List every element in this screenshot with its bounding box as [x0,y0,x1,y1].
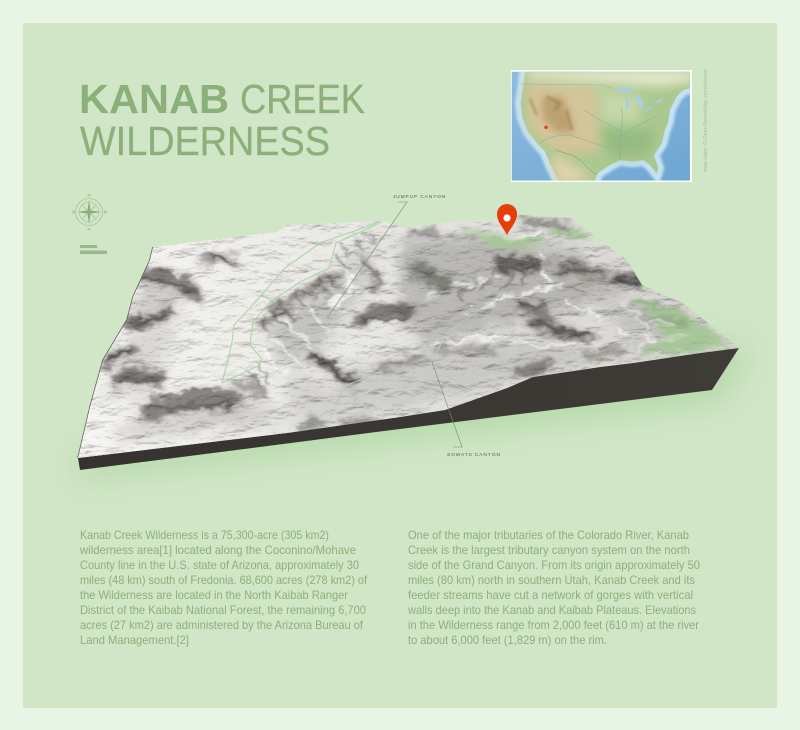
Great Lakes [615,88,663,112]
terrain surface [78,215,738,458]
text block: left column: miles (48 km) south of Fredonia. 68,600 acres (278 km2) of [80,574,368,587]
map credit: map data: © OpenStreetMap contributors [702,69,709,172]
broad shading [100,235,720,440]
canyon wall ribs [250,233,530,386]
river: Kanab Creek [327,293,503,433]
terrain block [70,205,750,470]
text block: left column: Land Management.[2] [80,634,189,647]
callout: Jumpup Canyon: JUMPUP CANYON [393,194,446,200]
title [79,76,365,164]
text block: right column [407,529,700,647]
dark mountains, soft outer [105,222,640,428]
text block: right column: miles (80 km) north in southern Utah, Kanab Creek and its [408,574,695,587]
text block: left column: District of the Kaibab National Forest, the remaining 6,700 [80,604,366,617]
text block: right column: One of the major tributaries of the Colorado River, Kanab [408,529,689,542]
title: KANAB [79,76,229,122]
callout: Sowats Canyon: SOWATS CANYON [447,452,501,458]
icon: compass rose [72,194,107,230]
marker: Kanab Creek location [544,126,548,129]
text block: right column: in the Wilderness range from 2,000 feet (610 m) at the river [408,619,699,632]
title: CREEK [240,76,365,122]
green vegetation [458,228,733,353]
text block: left column: the Wilderness are located in the North Kaibab Ranger [80,589,348,602]
text block: right column: feeder streams have cut a network of gorges with vertical [408,589,693,602]
drop shadow under terrain block [70,340,750,478]
text block: right column: to about 6,000 feet (1,829 m) on the rim. [408,634,607,647]
callout: Jumpup Canyon [327,194,446,318]
text block: left column [79,529,368,647]
text block: left column: acres (27 km2) are administered by the Arizona Bureau of [80,619,364,632]
scale bar [80,245,107,254]
dark mountains, crisp bands [108,256,640,407]
shaded relief [100,222,720,440]
left edge of block [78,247,153,458]
text block: right column: side of the Grand Canyon. From its origin approximately 50 [408,559,700,572]
text block: right column: walls deep into the Kanab and Kaibab Plateaus. Elevations [407,604,696,617]
text block: right column: Creek is the largest tributary canyon system on the north [408,544,690,557]
hillshade texture [79,216,738,458]
icon: location pin [497,204,517,235]
front wall of block [78,348,739,470]
text block: left column: County line in the U.S. state of Arizona, approximately 30 [80,559,359,572]
callout: Sowats Canyon [432,362,501,458]
locator map of the United States [511,70,693,187]
text block: left column: Kanab Creek Wilderness is a 75,300-acre (305 km2) [80,529,329,542]
title: WILDERNESS [80,118,330,164]
wilderness boundary [222,222,380,383]
canyon wall streaks, light [258,233,650,375]
text block: left column: wilderness area[1] located along the Coconino/Mohave [79,544,356,557]
